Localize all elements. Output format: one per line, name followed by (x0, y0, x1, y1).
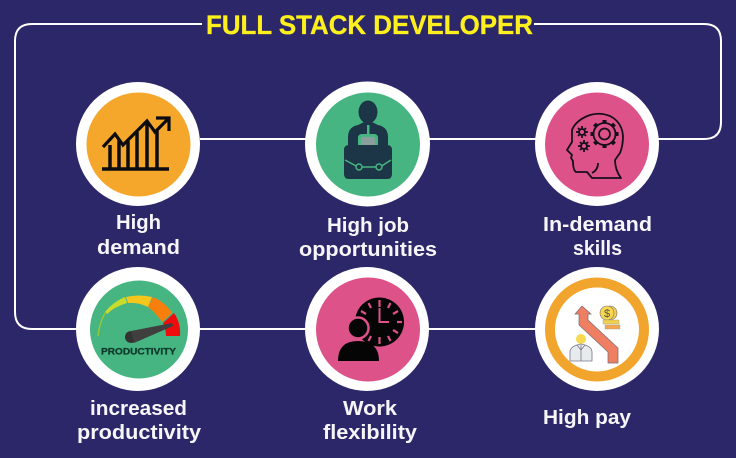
connector frame line (15, 24, 721, 329)
icon: businessman with briefcase (344, 100, 392, 179)
label: high: High (116, 212, 161, 234)
label: skills: skills (573, 238, 622, 260)
icon: rising bar chart (102, 118, 169, 169)
icon: head with gears (567, 114, 623, 178)
panel: high demand (76, 82, 200, 234)
label: high pay: High pay (543, 407, 632, 429)
icon: person and clock (338, 298, 404, 361)
label: in-demand: In-demand (543, 214, 652, 236)
label: work: Work (343, 398, 398, 420)
panel: high pay (535, 267, 659, 429)
gauge label: PRODUCTIVITY (101, 346, 177, 358)
panel: high job opportunities (305, 82, 430, 237)
icon: career arrow, coins and person: $ (604, 308, 610, 320)
panel: in-demand skills (535, 82, 659, 236)
label: high job: High job (327, 215, 409, 237)
panel: increased productivity (76, 267, 200, 420)
label: flexibility: flexibility (323, 422, 418, 444)
title: FULL STACK DEVELOPER (206, 10, 533, 40)
panel: work flexibility (305, 267, 429, 420)
label: productivity: productivity (77, 422, 202, 444)
label: opportunities: opportunities (299, 239, 437, 261)
label: increased: increased (90, 398, 187, 420)
icon: career arrow, coins and person (570, 306, 620, 363)
label: demand: demand (97, 237, 180, 259)
icon: productivity gauge (98, 296, 180, 358)
